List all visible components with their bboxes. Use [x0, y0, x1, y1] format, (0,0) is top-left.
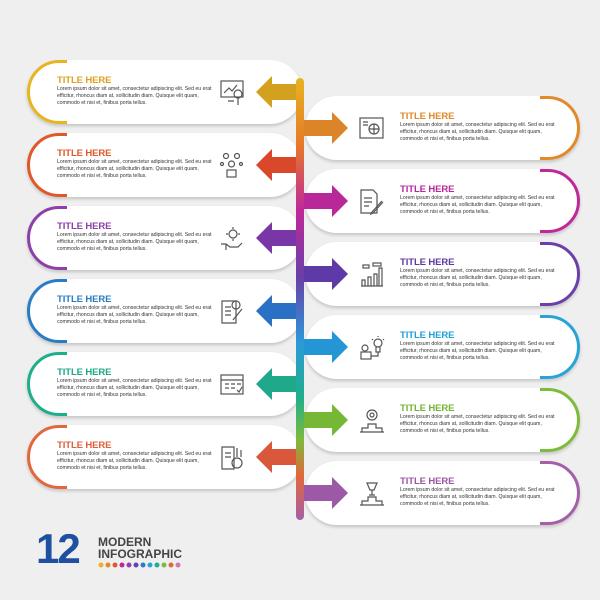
panel: left 2: TITLE HERE [57, 148, 111, 159]
panel: right 5: Lorem ipsum dolor sit amet, consectetur adipiscing elit. Sed eu erat efficitur, rhoncus diam at, sollicitudin diam. Quisque elit quam, commodo et nisi et, finibus porta tellus. [400, 414, 555, 434]
panel: left 3: Lorem ipsum dolor sit amet, consectetur adipiscing elit. Sed eu erat efficitur, rhoncus diam at, sollicitudin diam. Quisque elit quam, commodo et nisi et, finibus porta tellus. [57, 232, 212, 252]
panel: right 1: Lorem ipsum dolor sit amet, consectetur adipiscing elit. Sed eu erat efficitur, rhoncus diam at, sollicitudin diam. Quisque elit quam, commodo et nisi et, finibus porta tellus. [400, 122, 555, 142]
panel: left 5: TITLE HERE [57, 367, 111, 378]
panel: right 3: TITLE HERE [400, 257, 454, 268]
panel: left 4: Lorem ipsum dolor sit amet, consectetur adipiscing elit. Sed eu erat efficitur, rhoncus diam at, sollicitudin diam. Quisque elit quam, commodo et nisi et, finibus porta tellus. [57, 305, 212, 325]
panel: right 5: TITLE HERE [400, 403, 454, 414]
subtitle: MODERN [98, 535, 151, 549]
panel: left 6: Lorem ipsum dolor sit amet, consectetur adipiscing elit. Sed eu erat efficitur, rhoncus diam at, sollicitudin diam. Quisque elit quam, commodo et nisi et, finibus porta tellus. [57, 451, 212, 471]
panel: right 3: Lorem ipsum dolor sit amet, consectetur adipiscing elit. Sed eu erat efficitur, rhoncus diam at, sollicitudin diam. Quisque elit quam, commodo et nisi et, finibus porta tellus. [400, 268, 555, 288]
panel: left 4: TITLE HERE [57, 294, 111, 305]
panel: right 4: Lorem ipsum dolor sit amet, consectetur adipiscing elit. Sed eu erat efficitur, rhoncus diam at, sollicitudin diam. Quisque elit quam, commodo et nisi et, finibus porta tellus. [400, 341, 555, 361]
footer title [36, 525, 182, 572]
subtitle: INFOGRAPHIC [98, 547, 182, 561]
panel: right 2: TITLE HERE [400, 184, 454, 195]
panel: right 6: Lorem ipsum dolor sit amet, consectetur adipiscing elit. Sed eu erat efficitur, rhoncus diam at, sollicitudin diam. Quisque elit quam, commodo et nisi et, finibus porta tellus. [400, 487, 555, 507]
panel: left 3: TITLE HERE [57, 221, 111, 232]
panel: left 6: TITLE HERE [57, 440, 111, 451]
subtitle [98, 535, 182, 561]
color dots [98, 562, 180, 568]
panel: left 5: Lorem ipsum dolor sit amet, consectetur adipiscing elit. Sed eu erat efficitur, rhoncus diam at, sollicitudin diam. Quisque elit quam, commodo et nisi et, finibus porta tellus. [57, 378, 212, 398]
panel: right 4: TITLE HERE [400, 330, 454, 341]
panel: right 6: TITLE HERE [400, 476, 454, 487]
vertical timeline bar [296, 78, 304, 520]
panel: right 2: Lorem ipsum dolor sit amet, consectetur adipiscing elit. Sed eu erat efficitur, rhoncus diam at, sollicitudin diam. Quisque elit quam, commodo et nisi et, finibus porta tellus. [400, 195, 555, 215]
panel: left 2: Lorem ipsum dolor sit amet, consectetur adipiscing elit. Sed eu erat efficitur, rhoncus diam at, sollicitudin diam. Quisque elit quam, commodo et nisi et, finibus porta tellus. [57, 159, 212, 179]
number 12: 12 [36, 525, 79, 572]
panel: left 1: TITLE HERE [57, 75, 111, 86]
panel: right 1: TITLE HERE [400, 111, 454, 122]
panel: left 1: Lorem ipsum dolor sit amet, consectetur adipiscing elit. Sed eu erat efficitur, rhoncus diam at, sollicitudin diam. Quisque elit quam, commodo et nisi et, finibus porta tellus. [57, 86, 212, 106]
